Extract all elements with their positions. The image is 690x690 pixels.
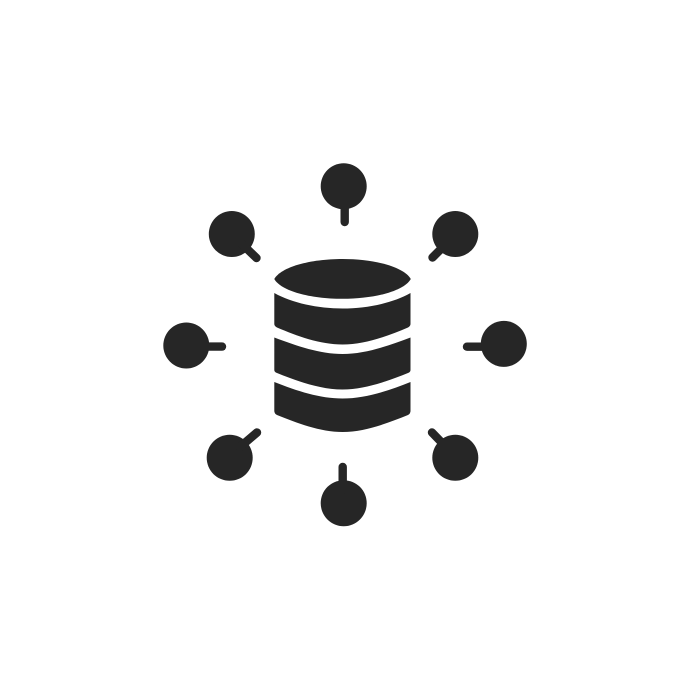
node: top <box>321 163 367 222</box>
node: top right <box>432 211 478 258</box>
node: right <box>467 321 527 367</box>
node: bottom right <box>432 432 478 481</box>
icon: database cylinder <box>274 259 411 432</box>
node: bottom left <box>207 432 257 481</box>
node: left <box>163 322 222 368</box>
icon: database network <box>163 163 527 526</box>
node: top left <box>209 211 256 258</box>
node: bottom <box>321 467 367 526</box>
